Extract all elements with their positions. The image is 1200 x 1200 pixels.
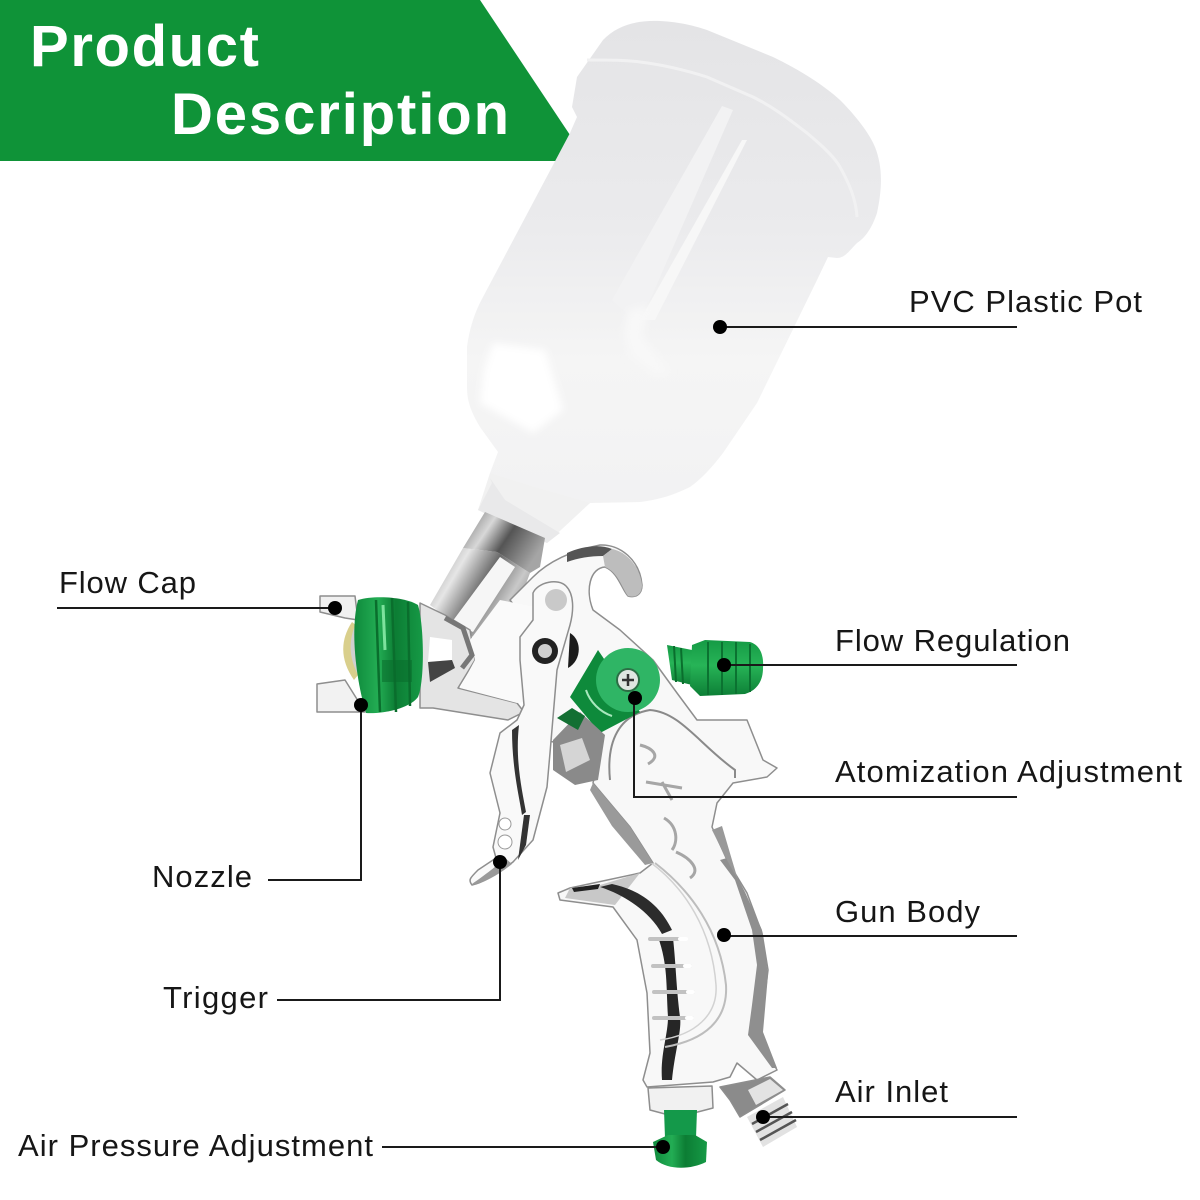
title banner: Product bbox=[30, 14, 259, 79]
label: Flow Regulation: Flow Regulation bbox=[835, 623, 1070, 658]
label: Air Pressure Adjustment: Air Pressure Adjustment bbox=[18, 1128, 373, 1163]
label: PVC Plastic Pot: PVC Plastic Pot bbox=[909, 284, 1142, 319]
label: Nozzle: Nozzle bbox=[152, 859, 252, 894]
fluid tube bbox=[430, 512, 545, 650]
air inlet fitting bbox=[720, 1077, 797, 1147]
air cap horns bbox=[317, 596, 366, 712]
label: Atomization Adjustment: Atomization Adjustment bbox=[835, 754, 1182, 789]
rear neck fitting bbox=[553, 708, 605, 785]
label: Nozzle bbox=[152, 698, 368, 894]
paint cup bbox=[467, 21, 881, 543]
label: Flow Regulation bbox=[717, 623, 1070, 672]
label: Air Pressure Adjustment bbox=[18, 1128, 670, 1163]
title banner bbox=[0, 0, 570, 161]
label: Air Inlet bbox=[756, 1074, 1017, 1124]
label: Gun Body: Gun Body bbox=[835, 894, 980, 929]
title banner: Description bbox=[171, 82, 509, 147]
label: Flow Cap bbox=[57, 565, 342, 615]
illustration: spray gun bbox=[317, 21, 881, 1168]
green atomization knob bbox=[570, 648, 660, 733]
green fluid nozzle ring bbox=[354, 597, 423, 713]
label: Flow Cap: Flow Cap bbox=[59, 565, 196, 600]
air pressure knob bbox=[648, 1086, 713, 1168]
label: Trigger bbox=[163, 855, 507, 1015]
gun body bbox=[510, 545, 777, 1087]
label: Air Inlet: Air Inlet bbox=[835, 1074, 948, 1109]
green flow regulation knob bbox=[667, 640, 763, 696]
label: Trigger: Trigger bbox=[163, 980, 268, 1015]
label: Gun Body bbox=[717, 894, 1017, 942]
gun head and front barrel bbox=[420, 600, 540, 720]
trigger bbox=[470, 582, 579, 885]
label: Atomization Adjustment bbox=[628, 691, 1182, 797]
label: PVC Plastic Pot bbox=[713, 284, 1142, 334]
